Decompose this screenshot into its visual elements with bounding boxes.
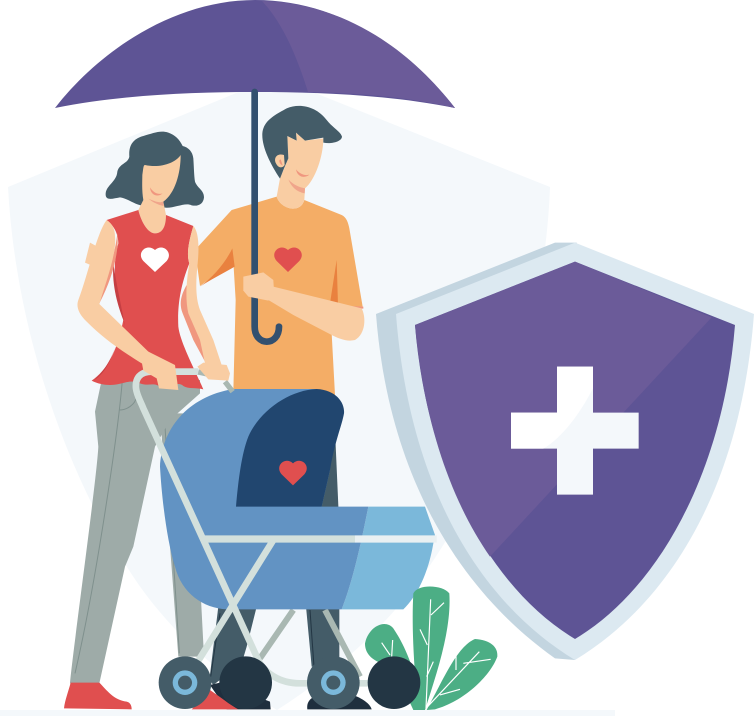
man hand — [243, 272, 274, 301]
umbrella pole and hands — [142, 92, 279, 392]
shirt heart — [274, 247, 302, 272]
woman arm shadows — [97, 233, 118, 304]
dress heart — [141, 247, 169, 272]
woman right arm — [186, 226, 222, 365]
man ear — [275, 154, 285, 167]
woman shoe — [64, 683, 132, 709]
cross — [511, 367, 639, 495]
wheel — [219, 656, 272, 709]
shield purple face — [415, 262, 735, 639]
hood heart — [279, 461, 307, 485]
rear struts — [260, 610, 360, 677]
shield back edge — [376, 243, 577, 660]
wheel — [159, 656, 211, 709]
woman dress — [92, 210, 203, 389]
ground strip — [0, 710, 615, 716]
woman hair — [106, 132, 204, 208]
woman face and neck — [138, 155, 181, 233]
umbrella pole — [255, 92, 279, 342]
woman second shoe — [192, 690, 238, 709]
shirt shadows — [200, 248, 235, 287]
handle grey end — [175, 362, 198, 382]
background shield — [8, 77, 550, 710]
wheel — [307, 656, 360, 709]
man's legs — [209, 430, 372, 709]
woman right hand — [197, 363, 230, 381]
man hair — [262, 106, 342, 179]
wheel — [368, 656, 420, 709]
stroller basket light — [342, 507, 435, 609]
umbrella canopy — [55, 0, 455, 108]
man's hand on woman's shoulder — [85, 243, 97, 267]
large shield — [376, 243, 754, 660]
woman left hand — [142, 352, 178, 390]
shield light rim — [396, 243, 754, 660]
handle end — [198, 372, 233, 392]
stroller — [136, 372, 497, 710]
shield highlight — [415, 262, 712, 557]
plant — [365, 586, 497, 710]
man upper body — [77, 106, 364, 395]
dress shadows — [113, 263, 125, 327]
frame — [136, 372, 273, 663]
man face and neck — [277, 133, 323, 209]
frame curve — [257, 657, 368, 683]
man shirt — [195, 197, 363, 395]
woman trousers — [64, 380, 238, 709]
woman left arm — [77, 220, 160, 363]
stroller hood — [236, 389, 344, 507]
stroller body — [160, 389, 368, 609]
man arm — [268, 287, 364, 341]
side rail — [203, 528, 355, 550]
